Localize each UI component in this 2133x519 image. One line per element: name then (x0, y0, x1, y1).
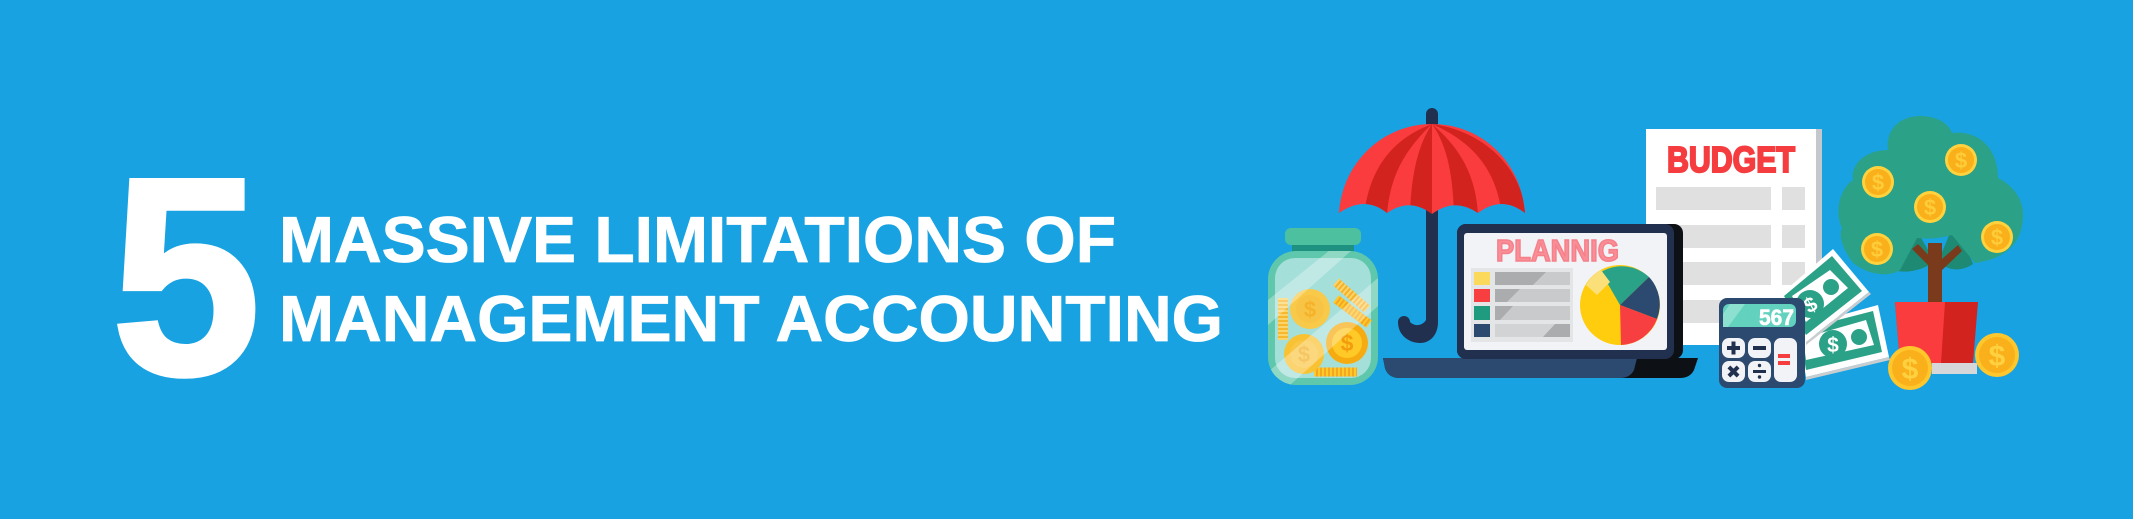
icon: money tree: $ (1871, 237, 1883, 262)
icon: umbrella (1339, 108, 1526, 343)
large coins: $ (1902, 353, 1919, 386)
tree coins: $ (1872, 170, 1884, 195)
icon: coin jar: $ (1298, 342, 1310, 367)
foliage (1838, 116, 2023, 274)
title: MASSIVE LIMITATIONS OF (279, 203, 1116, 276)
icon: budget document (1646, 129, 1822, 345)
icon: money tree: $ (1924, 195, 1936, 220)
front note: $ (1800, 292, 1822, 318)
legend list (1471, 268, 1573, 342)
icon: money tree: $ (1955, 148, 1967, 173)
icon: coin jar: $ (1341, 330, 1354, 356)
pot (1895, 302, 1978, 374)
foliage shadow (1898, 233, 1973, 272)
icon: laptop (1383, 224, 1698, 378)
icon: money tree (1838, 116, 2023, 390)
title (279, 203, 1223, 355)
icon: calculator (1719, 298, 1805, 388)
planning heading: PLANNIG (1496, 233, 1619, 268)
title: MANAGEMENT ACCOUNTING (279, 282, 1223, 355)
icon: coin jar: $ (1304, 297, 1316, 322)
tree coins (1862, 166, 1894, 198)
icon: money tree: $ (1989, 340, 2006, 373)
calculator display: 567 (1759, 305, 1794, 330)
budget heading: BUDGET (1667, 139, 1795, 180)
large coins (1888, 346, 1932, 390)
pie chart (1580, 265, 1660, 345)
back note: $ (1827, 334, 1839, 357)
icon: banknotes (1780, 249, 1890, 380)
coin stacks (1283, 282, 1369, 372)
icon: coin jar (1268, 228, 1378, 385)
number 5: 5 (111, 119, 261, 434)
icon: money tree: $ (1991, 225, 2003, 250)
